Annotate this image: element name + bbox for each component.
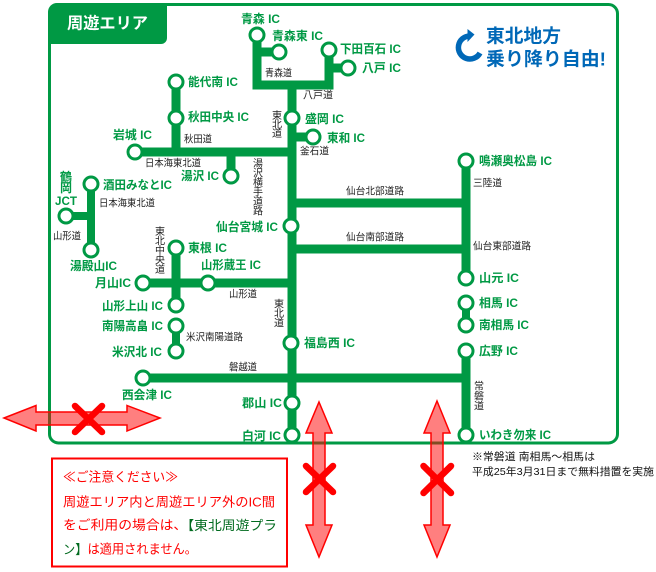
- callout: notice box: [52, 458, 287, 566]
- road name labels: 道: [155, 262, 165, 276]
- road name labels: 磐: [474, 390, 484, 402]
- IC: 山形蔵王: 山形蔵王 IC: [201, 257, 261, 272]
- footnote: 常磐道 free period: 平成25年3月31日まで無料措置を実施: [472, 465, 655, 478]
- IC: 月山: [95, 276, 150, 290]
- road name labels: 湯: [253, 156, 263, 170]
- callout: notice box: 周遊エリア内と周遊エリア外のIC間: [63, 494, 275, 510]
- road name labels: 東: [274, 297, 284, 310]
- IC: 湯殿山: 湯殿山IC: [70, 258, 117, 273]
- road name labels: 青森道: [265, 66, 292, 80]
- road name labels: 中: [155, 244, 165, 256]
- road name labels: 米沢南陽道路: [186, 330, 243, 344]
- road name labels: 八戸道: [303, 88, 333, 102]
- road name labels: 仙台東部道路: [473, 240, 531, 252]
- road name labels: 山形道: [53, 230, 81, 242]
- footnote: 常磐道 free period: ※常磐道 南相馬～相馬は: [472, 450, 595, 463]
- IC: 湯沢: 湯沢 IC: [181, 168, 219, 183]
- IC: 秋田中央: 秋田中央 IC: [188, 109, 249, 124]
- JCT: 鶴岡: 岡: [60, 181, 72, 195]
- IC: 東和: 東和 IC: [327, 130, 365, 145]
- IC: 鳴瀬奥松島: 鳴瀬奥松島 IC: [479, 153, 552, 168]
- IC: 相馬: 相馬 IC: [479, 295, 518, 310]
- IC: 南相馬: [459, 317, 529, 332]
- IC: 東根: [169, 240, 227, 255]
- IC: 山元: [459, 271, 519, 285]
- IC: 南陽高畠: 南陽高畠 IC: [102, 318, 163, 333]
- IC: 八戸: [341, 61, 401, 75]
- callout: notice box: ン】は適用されません。: [63, 542, 197, 556]
- road name labels: 山形道: [229, 288, 257, 300]
- road name labels: 北: [274, 308, 284, 320]
- IC: 南相馬: 南相馬 IC: [479, 317, 529, 332]
- heading tab: 周遊エリア: 周遊エリア: [67, 14, 148, 32]
- JCT: 鶴岡: JCT: [55, 194, 78, 208]
- IC: 広野: [459, 344, 518, 358]
- road name labels: 央: [155, 253, 165, 266]
- IC: 岩城: 岩城 IC: [113, 127, 152, 142]
- IC: いわき勿来: いわき勿来 IC: [479, 427, 551, 442]
- IC: 東和: [306, 130, 365, 145]
- IC: 仙台宮城: 仙台宮城 IC: [216, 219, 278, 234]
- callout: notice box: ≪ご注意ください≫: [63, 470, 178, 484]
- IC: 西会津: [122, 371, 172, 402]
- road name labels: 仙台南部道路: [346, 230, 404, 244]
- IC: 米沢北: [112, 344, 183, 359]
- IC: 白河: [242, 428, 299, 443]
- road name labels: 日本海東北道: [145, 156, 201, 170]
- JCT: 鶴岡: 鶴: [60, 169, 72, 184]
- IC: 能代南: 能代南 IC: [188, 74, 238, 89]
- road name labels: 路: [253, 204, 263, 217]
- IC: 東根: 東根 IC: [188, 240, 227, 255]
- road name labels: 日本海東北道: [99, 196, 155, 210]
- IC: 山形上山: 山形上山 IC: [102, 299, 163, 313]
- arrow: south boundary blocked, Joban expressway: [424, 401, 451, 557]
- road name labels: [53, 66, 531, 412]
- road name labels: 北: [272, 118, 282, 130]
- road name labels: 東: [272, 108, 282, 122]
- IC: 下田百石: 下田百石 IC: [340, 42, 401, 56]
- IC: 八戸: 八戸 IC: [362, 61, 401, 75]
- IC: 郡山: 郡山 IC: [242, 396, 282, 410]
- road name labels: 常: [474, 379, 484, 392]
- IC: 酒田みなと: 酒田みなとIC: [103, 177, 172, 192]
- road name labels: 道: [272, 126, 282, 140]
- IC: 湯殿山: [70, 243, 117, 273]
- road name labels: 秋田道: [184, 132, 212, 146]
- IC: 湯沢: [181, 168, 238, 183]
- road name labels: 道: [253, 194, 263, 208]
- IC: 能代南: [169, 74, 238, 89]
- arrow: south boundary blocked, Tohoku expressway: [306, 402, 333, 557]
- IC: 白河: 白河 IC: [242, 428, 281, 443]
- IC: 盛岡: 盛岡 IC: [305, 111, 344, 126]
- road name labels: 仙台北部道路: [346, 184, 404, 198]
- IC: 米沢北: 米沢北 IC: [112, 344, 162, 359]
- IC: 山元: 山元 IC: [479, 271, 519, 285]
- IC: 広野: 広野 IC: [479, 344, 518, 358]
- IC: 秋田中央: [169, 109, 249, 125]
- logo: 東北地方 乗り降り自由!: 乗り降り自由!: [486, 48, 606, 70]
- road name labels: 横: [253, 176, 263, 188]
- IC: 盛岡: [285, 111, 344, 126]
- JCT: 鶴岡: [55, 169, 78, 223]
- road name labels: 道: [274, 316, 284, 329]
- panel: area frame: [50, 4, 618, 443]
- road name labels: 磐越道: [229, 360, 257, 374]
- IC: 青森東: [272, 28, 323, 59]
- IC: 相馬: [459, 295, 518, 310]
- logo: 東北地方 乗り降り自由!: 東北地方: [486, 26, 561, 46]
- road name labels: 三陸道: [473, 176, 502, 190]
- road name labels: 釜石道: [300, 144, 329, 158]
- arrow: west boundary blocked: [4, 406, 160, 432]
- logo: 東北地方 乗り降り自由!: [458, 26, 606, 70]
- callout: notice box: をご利用の場合は、 【東北周遊プラ: [63, 518, 277, 532]
- IC: 青森: [241, 11, 280, 42]
- road name labels: 北: [155, 235, 165, 247]
- road name labels: 東: [155, 224, 165, 238]
- IC: 岩城: [113, 127, 152, 159]
- IC: 西会津: 西会津 IC: [122, 387, 172, 402]
- IC: 福島西: 福島西 IC: [304, 335, 355, 350]
- IC: 福島西: [284, 335, 355, 350]
- road name labels: 手: [253, 185, 263, 198]
- IC: 青森東: 青森東 IC: [272, 28, 323, 43]
- heading tab: 周遊エリア: [48, 3, 167, 44]
- IC: 山形蔵王: [201, 257, 261, 290]
- road network lines: [66, 35, 466, 435]
- road name labels: 道: [474, 399, 484, 412]
- IC: 青森: 青森 IC: [241, 11, 280, 26]
- IC: 郡山: [242, 396, 299, 410]
- footnote: 常磐道 free period: [472, 450, 655, 478]
- road name labels: 沢: [253, 166, 263, 179]
- IC: 月山: 月山IC: [95, 276, 131, 290]
